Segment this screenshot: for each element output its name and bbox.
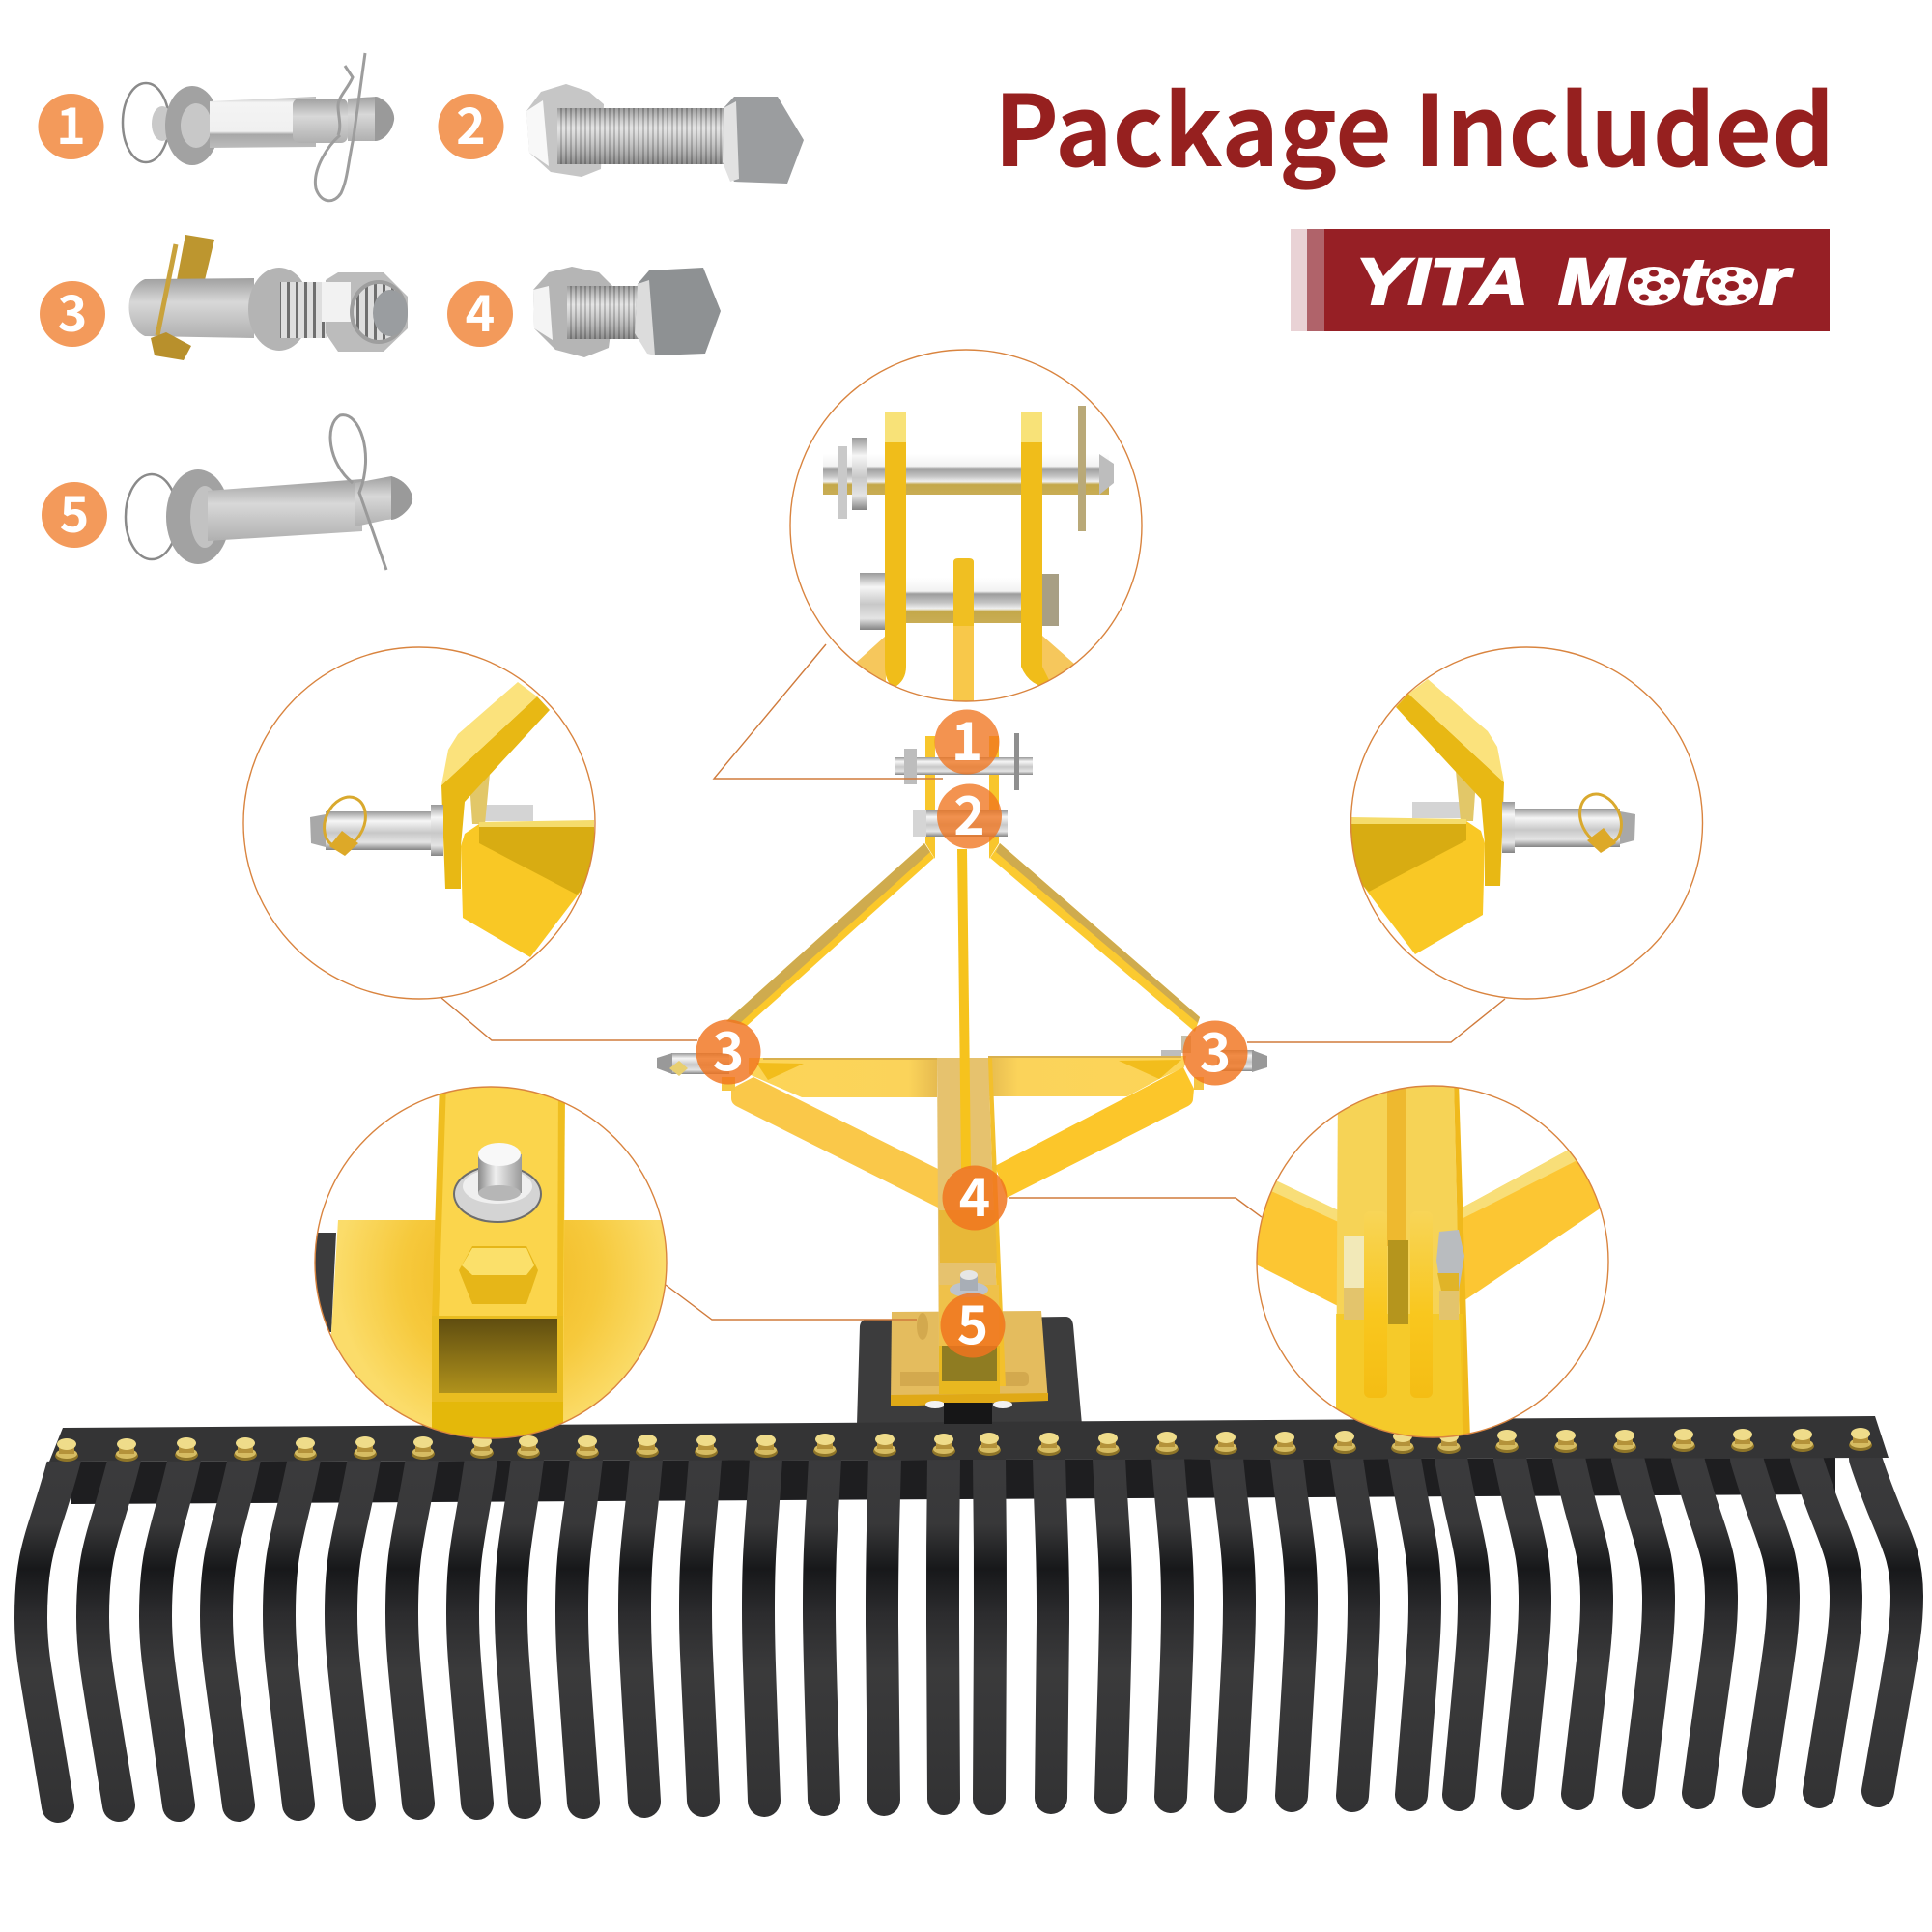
badge 3: [40, 273, 105, 347]
central tube: [937, 1058, 1006, 1386]
frame badge 3 right: [1182, 1009, 1248, 1087]
left upright plate: [925, 736, 935, 859]
right lower strut: [995, 1067, 1194, 1198]
frame badge 2: 2: [953, 773, 985, 850]
part 2: long hex bolt and nut: [526, 84, 804, 184]
detail circle: lug joint: [1256, 1085, 1609, 1438]
logo text: o: [1629, 244, 1677, 319]
part 4: short hex bolt and nut: [533, 267, 721, 357]
logo banner: YITA Motor: [1291, 229, 1830, 331]
badge 1: 1: [56, 86, 86, 158]
left lower strut: [731, 1077, 938, 1208]
logo text: o: [1706, 244, 1754, 319]
bolt on tube: [950, 1270, 988, 1297]
logo text: YITA: [1355, 244, 1525, 319]
title: Package Included: [994, 53, 1834, 195]
yellow plate: [330, 1220, 667, 1428]
center brace: [957, 849, 971, 1169]
bolt at upper mount: [913, 810, 1008, 837]
badge 5: [42, 474, 107, 548]
detail circle: left lift arm pin: [243, 647, 595, 999]
under bar: [71, 1458, 1835, 1504]
badge 4: 4: [466, 273, 495, 346]
badges on frame: [696, 698, 1248, 1359]
frame badge 2: [937, 773, 1002, 850]
tube opening: [432, 1316, 563, 1402]
right nut: [1436, 1230, 1464, 1320]
right arm: [990, 843, 1200, 1032]
right lift pin: [1161, 1036, 1267, 1072]
part 1: clevis pin with ring and clip: [123, 53, 394, 201]
badge 1: [39, 86, 104, 159]
left strut: [1258, 1180, 1337, 1306]
center tab: [953, 558, 974, 705]
frame badge 5: [941, 1282, 1005, 1359]
right upright plate: [989, 736, 999, 859]
upper pin: [823, 406, 1114, 531]
black plate corner: [315, 1233, 336, 1332]
detail circle: right lift arm pin: [1350, 647, 1702, 999]
mounting plate: [857, 1317, 1082, 1425]
tines: [31, 1459, 1907, 1806]
yellow three-point hitch frame: [657, 733, 1267, 1424]
frame badge 3 left: 3: [713, 1009, 744, 1086]
frame badge 1: 1: [952, 698, 982, 776]
detail circle: tube and base plate: [309, 1082, 676, 1443]
plates: [885, 412, 1053, 688]
bar bolts: [55, 1428, 1872, 1462]
badge 4: [447, 273, 513, 347]
frame badge 1: [935, 698, 999, 776]
frame badge 4: [943, 1154, 1007, 1232]
frame badge 4: 4: [959, 1154, 990, 1232]
frame badge 3 right: 3: [1200, 1009, 1231, 1087]
badge 2: [439, 86, 504, 159]
landscape rake tool bar and tines: [31, 1317, 1907, 1806]
pin with washer: [454, 1143, 541, 1222]
logo text: t: [1680, 244, 1710, 319]
square tube: [432, 1082, 565, 1440]
lugs: [1364, 1211, 1433, 1398]
pin at top mount: [895, 733, 1033, 790]
right cross bar: [988, 1056, 1186, 1096]
logo text: r: [1759, 244, 1793, 319]
badge 5: 5: [60, 474, 89, 547]
tube hollow end: [939, 1346, 1000, 1394]
part 3: threaded pin with brass clip: [129, 235, 408, 360]
wheel letter 1: [1628, 267, 1680, 305]
logo text: M: [1558, 244, 1626, 319]
wedges: [857, 636, 1074, 682]
top bar: [49, 1416, 1889, 1462]
left nut: [1344, 1236, 1364, 1320]
badge 2: 2: [456, 86, 486, 158]
part 5: long clevis pin with ring and clip: [126, 415, 412, 570]
left cross bar: [749, 1058, 937, 1097]
frame badge 3 left: [696, 1009, 761, 1086]
left lift pin: [657, 1053, 729, 1076]
frame badge 5: 5: [957, 1282, 988, 1359]
parts list: hardware 1 to 5: [39, 53, 804, 570]
detail circle: top mount pins: [790, 350, 1142, 705]
right strut: [1457, 1150, 1600, 1300]
central tube: [1336, 1082, 1470, 1439]
wheel letter 2: [1706, 267, 1758, 305]
strut end pads: [722, 1077, 1204, 1091]
left arm: [726, 843, 934, 1026]
base plate: [891, 1311, 1048, 1424]
hex reflection: [459, 1246, 538, 1304]
badge 3: 3: [58, 273, 87, 346]
leader lines: [441, 644, 1505, 1320]
lower pin: [860, 573, 1059, 630]
